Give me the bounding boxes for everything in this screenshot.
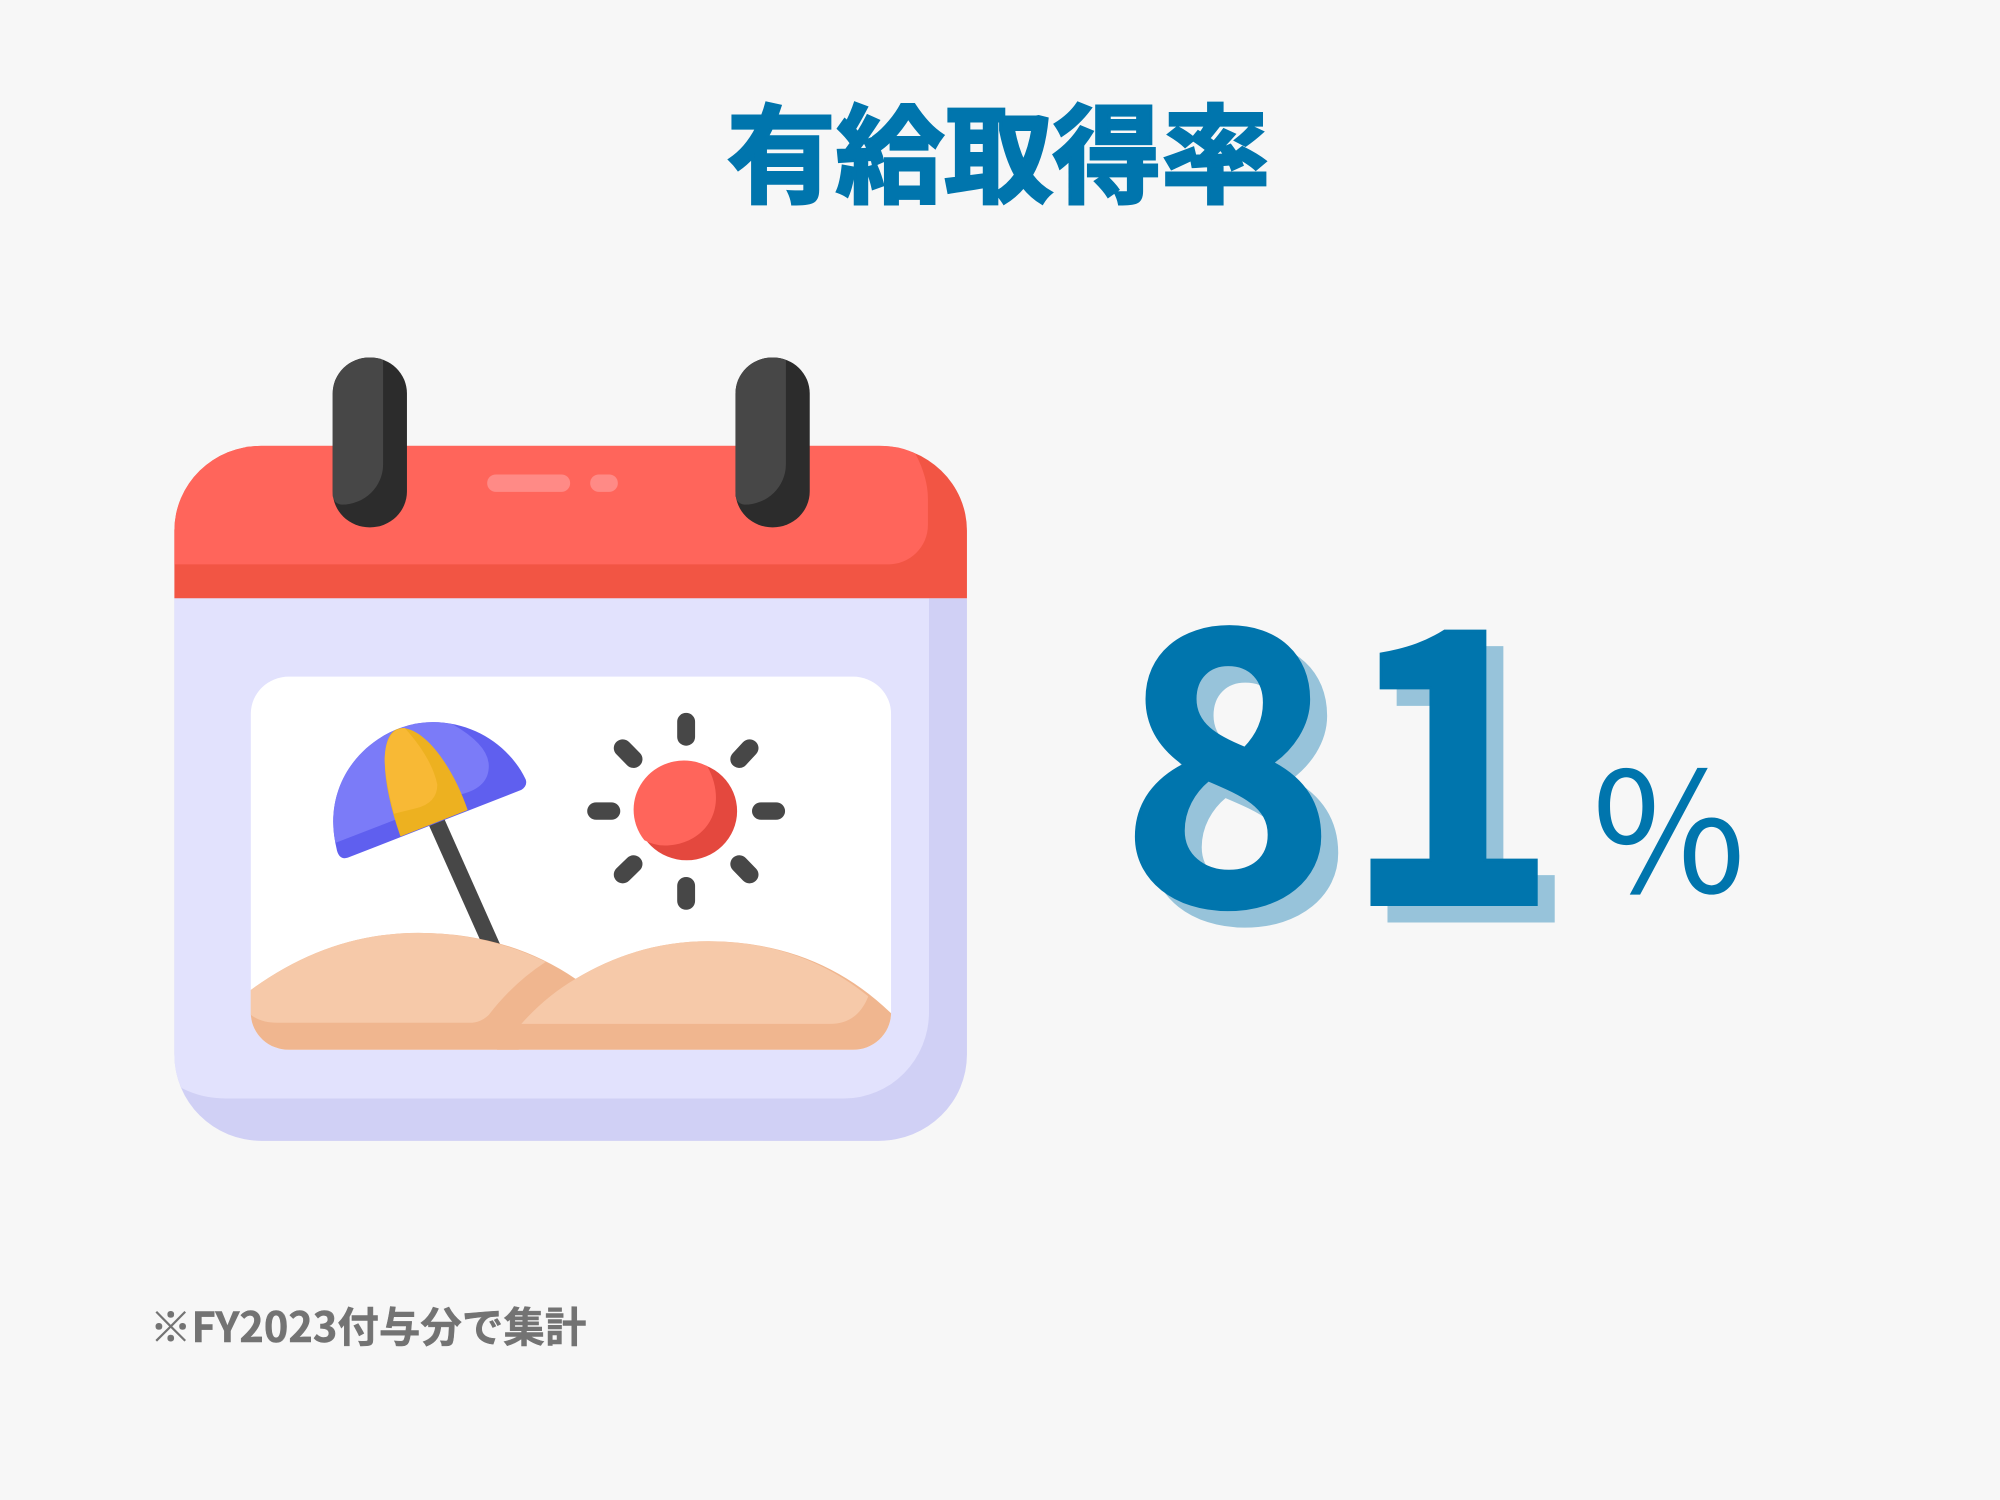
left sand dune	[251, 933, 576, 1050]
umbrella pole	[429, 819, 500, 944]
sun	[596, 722, 776, 901]
right sand dune	[497, 941, 891, 1050]
percent sign: %	[1592, 700, 1746, 942]
left binding ring	[333, 357, 407, 527]
footnote: ※FY2023付与分で集計	[150, 1294, 586, 1354]
umbrella	[333, 722, 526, 858]
number shadow: 81	[1136, 494, 1581, 1028]
white picture panel	[251, 677, 891, 1050]
icon: calendar with beach scene	[174, 357, 967, 1141]
right binding ring	[735, 357, 810, 527]
calendar red header	[174, 446, 967, 598]
calendar body	[174, 598, 967, 1141]
title: 有給取得率	[727, 71, 1270, 226]
number 81: 81	[1119, 478, 1564, 1012]
big number 81 percent	[1119, 478, 1746, 1028]
